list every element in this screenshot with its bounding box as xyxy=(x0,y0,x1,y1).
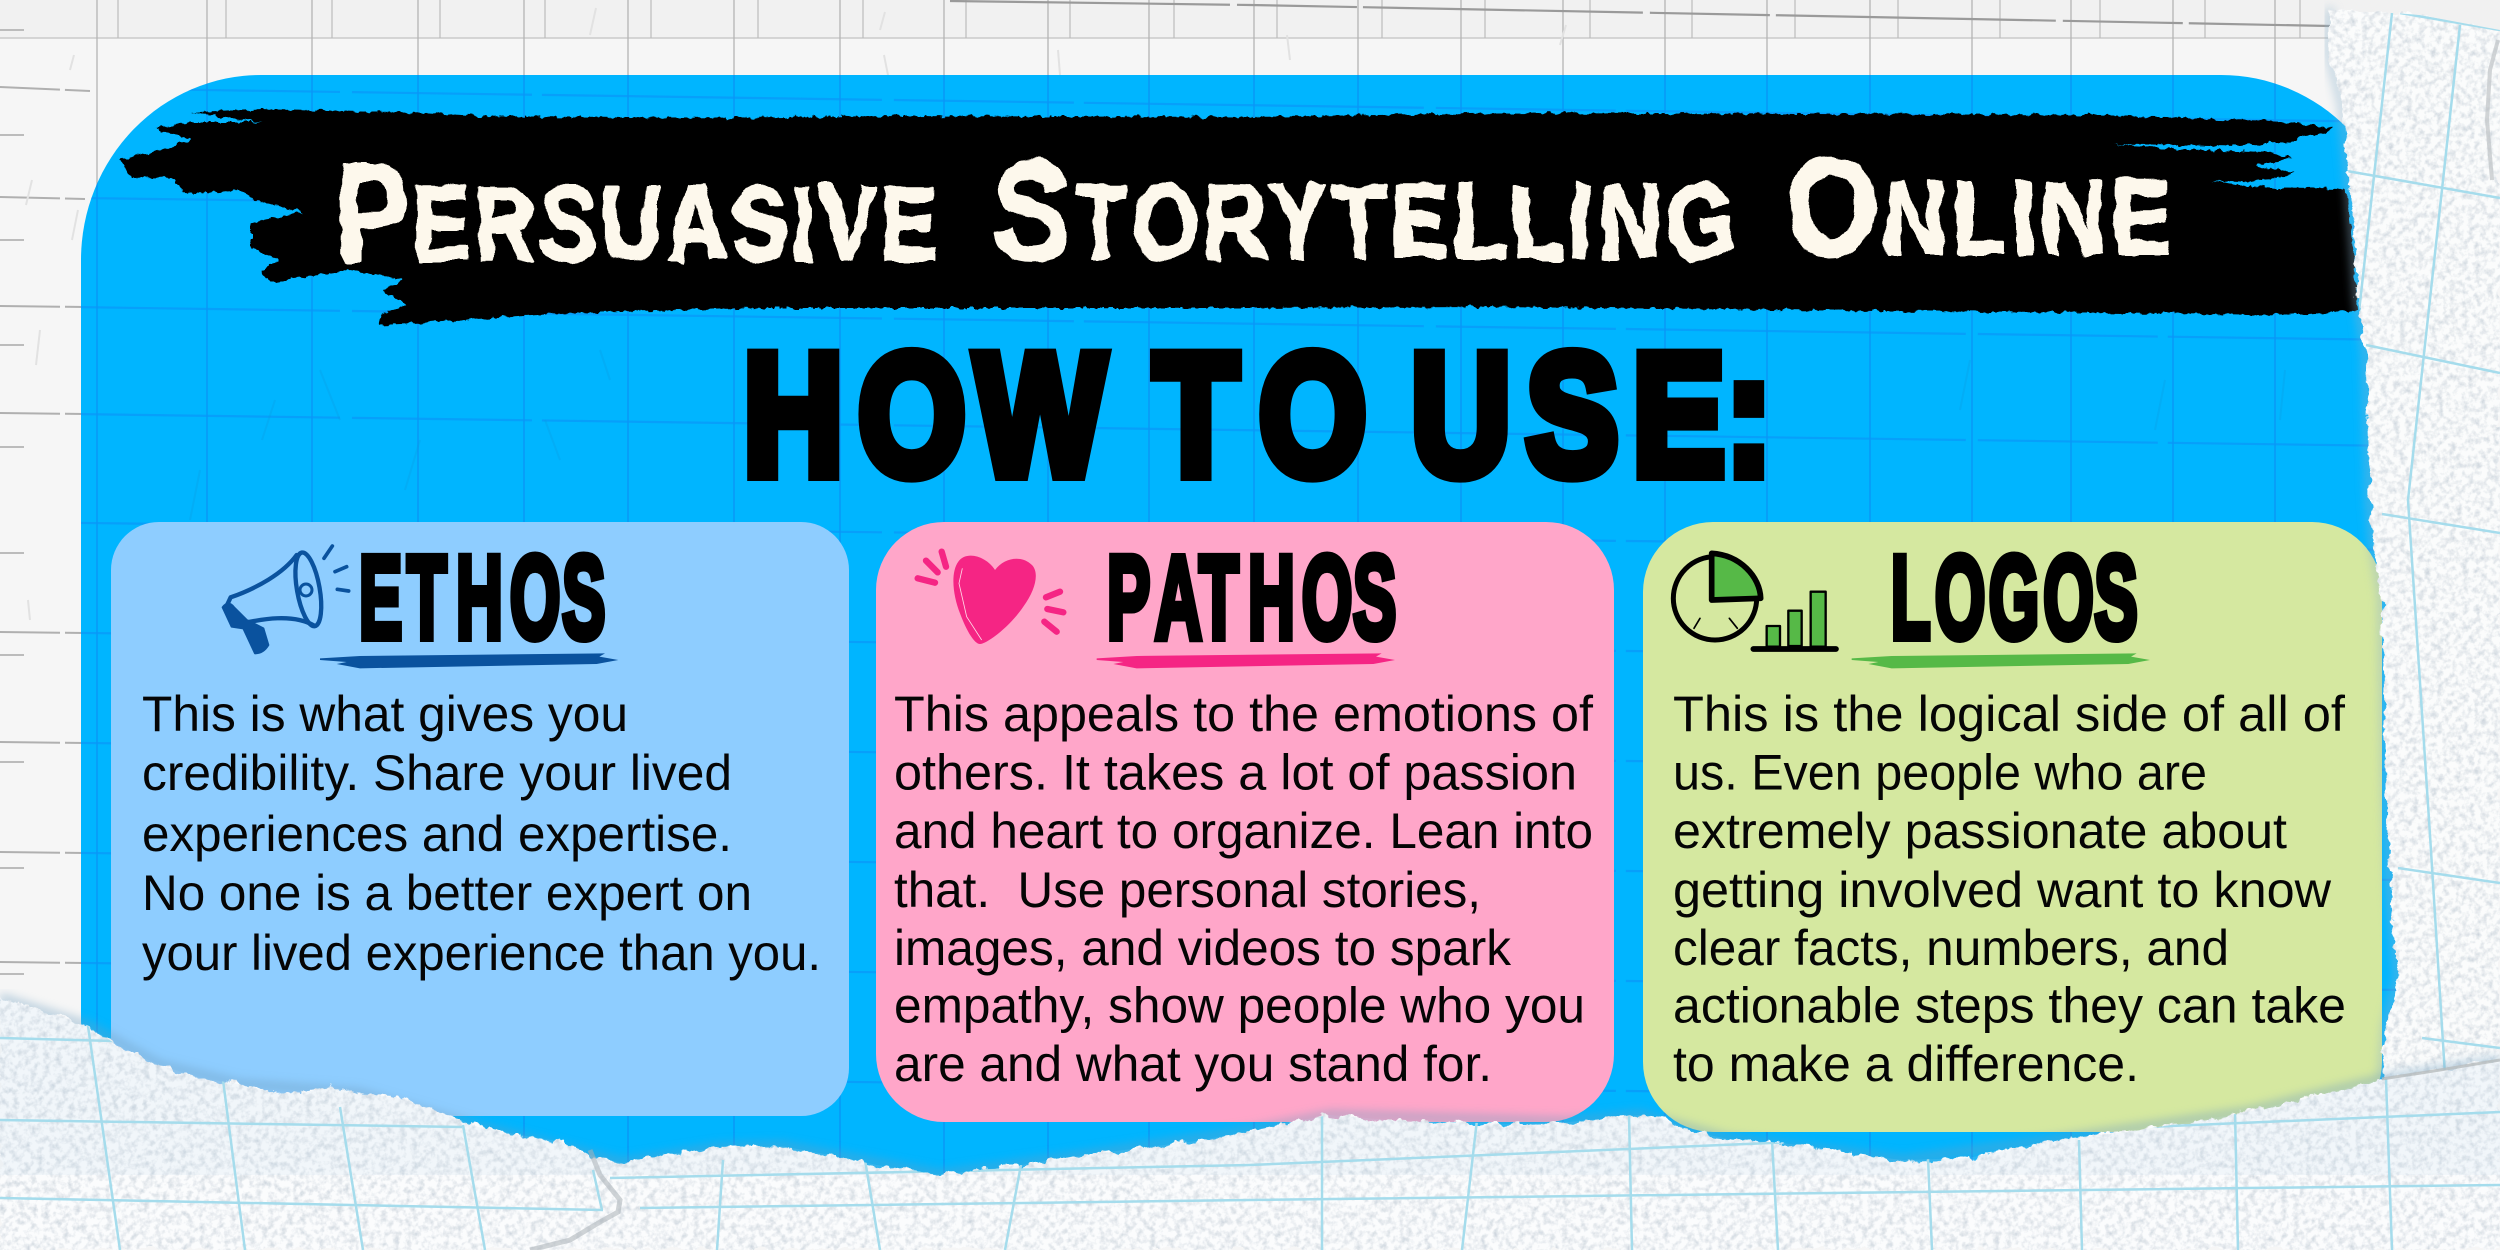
text: logos description: getting involved want to know xyxy=(1673,862,2332,918)
icon: megaphone xyxy=(223,546,349,653)
underline: ethos xyxy=(320,653,618,668)
text: logos description: extremely passionate about xyxy=(1673,803,2287,859)
text: logos description: This is the logical side of all of xyxy=(1673,686,2345,742)
text: ethos description: your lived experience than you. xyxy=(142,925,821,981)
heading: pathos: PATHOS xyxy=(1107,533,1396,664)
underline: logos xyxy=(1852,653,2150,668)
panel: ethos xyxy=(111,522,849,1116)
title xyxy=(335,130,2175,290)
text: ethos description: This is what gives you xyxy=(142,686,628,742)
heading: logos: LOGOS xyxy=(1891,533,2138,664)
text: pathos description: others. It takes a lot of passion xyxy=(894,744,1577,800)
torn paper: bottom strip xyxy=(0,990,2500,1250)
text: pathos description: are and what you stand for. xyxy=(894,1036,1492,1092)
underline: pathos xyxy=(1097,653,1395,668)
text: ethos description: No one is a better expert on xyxy=(142,865,752,921)
subheading: how to use: HOW TO USE: xyxy=(744,319,1772,512)
text: pathos description: and heart to organize. Lean into xyxy=(894,803,1593,859)
icon: heart xyxy=(918,552,1063,644)
torn paper: right strip xyxy=(2328,8,2500,1079)
heading: ethos: ETHOS xyxy=(359,533,605,664)
text: pathos description: This appeals to the emotions of xyxy=(894,686,1593,742)
text: ethos description: experiences and expertise. xyxy=(142,806,732,862)
text: pathos description xyxy=(894,686,1593,1092)
panel: logos xyxy=(1643,522,2382,1132)
text: pathos description: empathy, show people who you xyxy=(894,978,1585,1034)
text: logos description: clear facts, numbers, and xyxy=(1673,920,2229,976)
text: ethos description: credibility. Share your lived xyxy=(142,745,732,801)
panel: pathos xyxy=(876,522,1614,1122)
text: pathos description: that. Use personal stories, xyxy=(894,862,1481,918)
text: logos description: to make a difference. xyxy=(1673,1036,2139,1092)
title: STORYTELLING xyxy=(993,134,1739,288)
icon: pie chart and bars xyxy=(1673,553,1836,649)
text: logos description: us. Even people who are xyxy=(1673,744,2207,800)
title: ONLINE xyxy=(1786,130,2175,284)
text: pathos description: images, and videos to spark xyxy=(894,920,1512,976)
text: ethos description xyxy=(142,686,821,981)
text: logos description: actionable steps they can take xyxy=(1673,978,2346,1034)
title: PERSUASIVE xyxy=(335,136,941,290)
black brush stroke banner xyxy=(120,109,2358,325)
text: logos description xyxy=(1673,686,2346,1092)
